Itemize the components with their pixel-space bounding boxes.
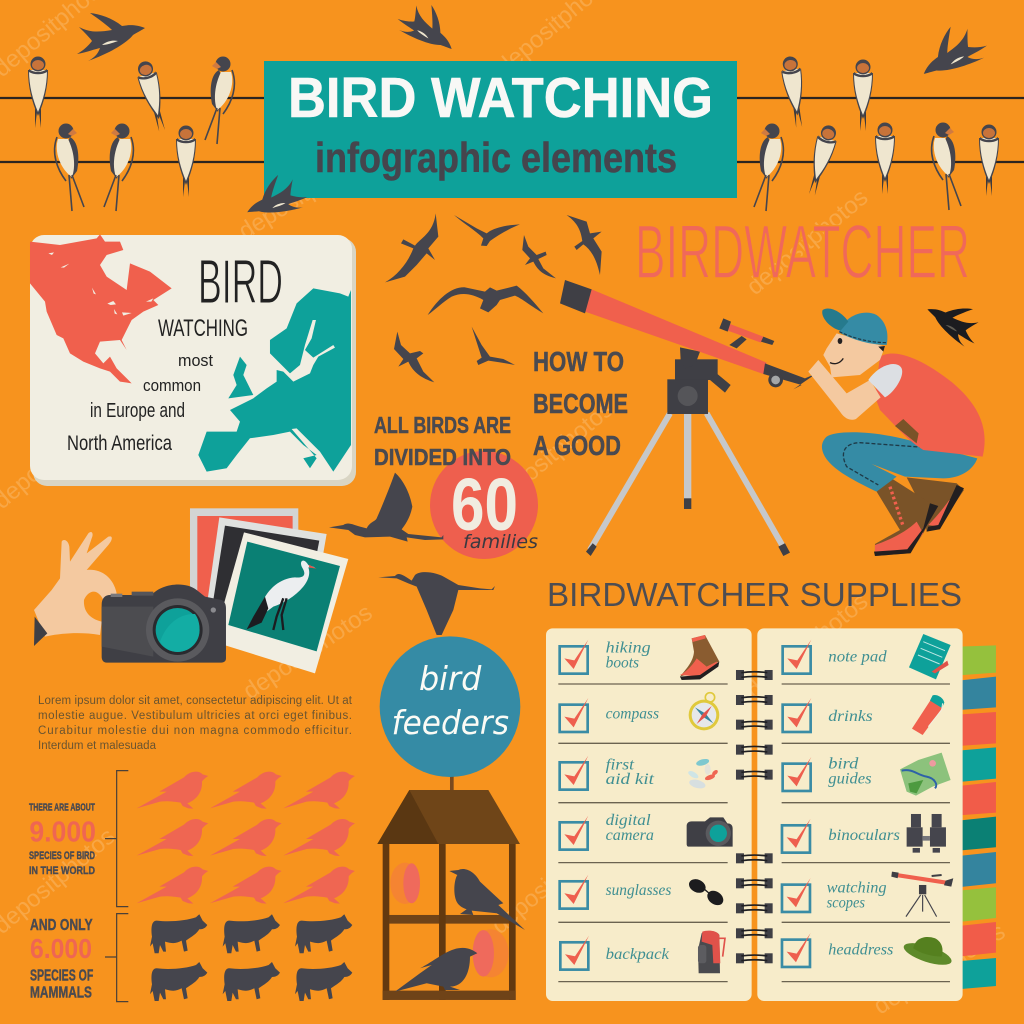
telescope tube [585,289,767,374]
right page [757,628,963,1001]
watermarks: depositphotos [487,396,618,513]
photos [190,508,348,673]
map text: WATCHING [158,315,248,342]
checklist labels: camera [606,827,654,844]
all birds are divided into 60 families [329,412,538,559]
subtitle: infographic elements [315,134,677,181]
map text: in Europe and [90,400,185,422]
stat: 6.000 species of mammals: SPECIES OF [30,968,93,985]
map text: North America [67,432,172,455]
lorem ipsum text: Interdum et malesuada [38,740,157,752]
watermarks: depositphotos [238,599,377,705]
boots [874,477,964,556]
watermarks: depositphotos [487,823,618,940]
checklist labels: bird [828,755,859,772]
icon: map [900,753,951,796]
bird on lower perch [395,948,477,992]
all birds are divided into 60 families: families [463,531,538,553]
camera, hand and photos [34,508,348,673]
map text: common [143,376,201,395]
lorem ipsum text [38,695,353,752]
title banner [264,61,737,198]
icon: crane on photo [247,561,317,630]
trousers [822,432,977,492]
checklist labels: drinks [828,708,873,725]
species comparison [29,771,355,1002]
checklist labels: sunglasses [606,882,671,899]
watermarks: depositphotos [742,184,873,301]
icon: note pad [909,634,951,679]
all birds are divided into 60 families: ALL BIRDS ARE [374,412,511,438]
checklist labels: guides [828,770,872,787]
perched swallows left [28,56,234,211]
checklist labels: binoculars [828,827,900,844]
lorem ipsum text: molestie augue. Vestibulum ultricies at orci eget finibus. [38,710,352,722]
birdwatcher figure [808,308,985,556]
checklist labels: hiking [606,639,651,656]
checklist labels: backpack [606,946,670,963]
how to become a good: BECOME [533,388,628,419]
sign: bird feeders [380,636,520,777]
checklist labels: first [606,756,635,773]
checkboxes [560,640,811,970]
left page [546,628,752,1001]
stat: 9.000 species of bird: IN THE WORLD [29,865,95,877]
sign: bird feeders: feeders [392,703,509,742]
lorem ipsum text: Lorem ipsum dolor sit amet, consectetur adipiscing elit. Ut at [38,695,353,707]
checklist labels: aid kit [606,771,655,788]
tabs [958,645,996,989]
vest [875,354,985,457]
checklist labels: compass [606,705,659,722]
icon: thermos [912,695,944,735]
stat: 9.000 species of bird: 9.000 [29,817,96,849]
eyepiece [763,363,817,389]
head [823,333,885,377]
icon: boot [680,635,719,680]
how to become a good: HOW TO [533,346,624,377]
hand [34,532,117,637]
how to become a good [533,346,628,461]
checklist labels: boots [606,654,639,671]
stat: 9.000 species of bird: THERE ARE ABOUT [29,803,95,814]
stat: 6.000 species of mammals [30,917,93,1001]
tripod legs [586,413,790,556]
icon: pills [687,758,719,790]
checklist labels: watching [827,879,887,896]
stat: 6.000 species of mammals: AND ONLY [30,917,93,934]
telescope on tripod [560,280,817,556]
finder scope [719,318,774,348]
grapefruit slices [390,863,509,977]
icon: backpack [698,931,725,973]
feeder house [377,790,520,1000]
notebook checklist [546,628,996,1001]
title: BIRD WATCHING [288,66,713,130]
crane on sign [378,572,495,635]
row lines [558,684,950,982]
perched swallows right [754,55,999,211]
icon: watching scope [891,872,953,917]
watermarks: depositphotos [742,588,873,705]
map text: most [178,351,213,370]
sign: bird feeders: bird [419,659,482,698]
checklist labels [606,639,900,963]
map text: BIRD [198,248,283,317]
icon grid: birds [137,772,355,904]
pocket [895,419,919,443]
icon: sunglasses [687,877,726,908]
icon: crane [329,473,443,542]
brackets [105,771,128,1002]
checklist labels: scopes [827,894,865,911]
arm [808,360,881,420]
map: Europe [198,288,351,472]
stat: 6.000 species of mammals: 6.000 [30,933,92,964]
camera [102,585,226,663]
cuff [34,617,47,646]
watermarks: depositphotos [869,918,1010,1020]
sleeve [868,364,902,397]
cap [839,313,887,345]
icon grid: cows [150,914,352,1001]
icon: hat [901,937,954,969]
checklist labels: digital [606,812,651,829]
bird feeder [377,572,525,1000]
pole [450,773,454,792]
heading: birdwatcher supplies: BIRDWATCHER SUPPLIES [547,576,962,613]
stat: 9.000 species of bird: SPECIES OF BIRD [29,850,95,862]
flock of birds [385,213,602,382]
all birds are divided into 60 families: DIVIDED INTO [374,444,511,470]
spiral rings [736,670,773,963]
stat: 6.000 species of mammals: MAMMALS [30,984,92,1001]
map panel: Europe and North America [30,234,356,486]
telescope mount [667,347,731,414]
circle: 60 families [430,451,538,559]
checklist labels: note pad [828,649,887,666]
flying swallows [77,0,992,349]
bird on upper perch [449,869,525,930]
icon: compass [689,693,719,730]
map text [67,248,283,455]
stat: 9.000 species of bird [29,803,96,877]
lorem ipsum text: Curabitur molestie dui non magna commodo efficitur. [38,725,352,737]
watermarks: depositphotos [234,143,375,245]
map: North America [30,234,172,383]
icon: binoculars [907,814,946,853]
icon: digital camera [687,817,733,847]
all birds are divided into 60 families: 60 [451,463,518,546]
wires [0,98,1024,162]
checklist labels: headdress [828,941,893,958]
how to become a good: A GOOD [533,430,621,461]
